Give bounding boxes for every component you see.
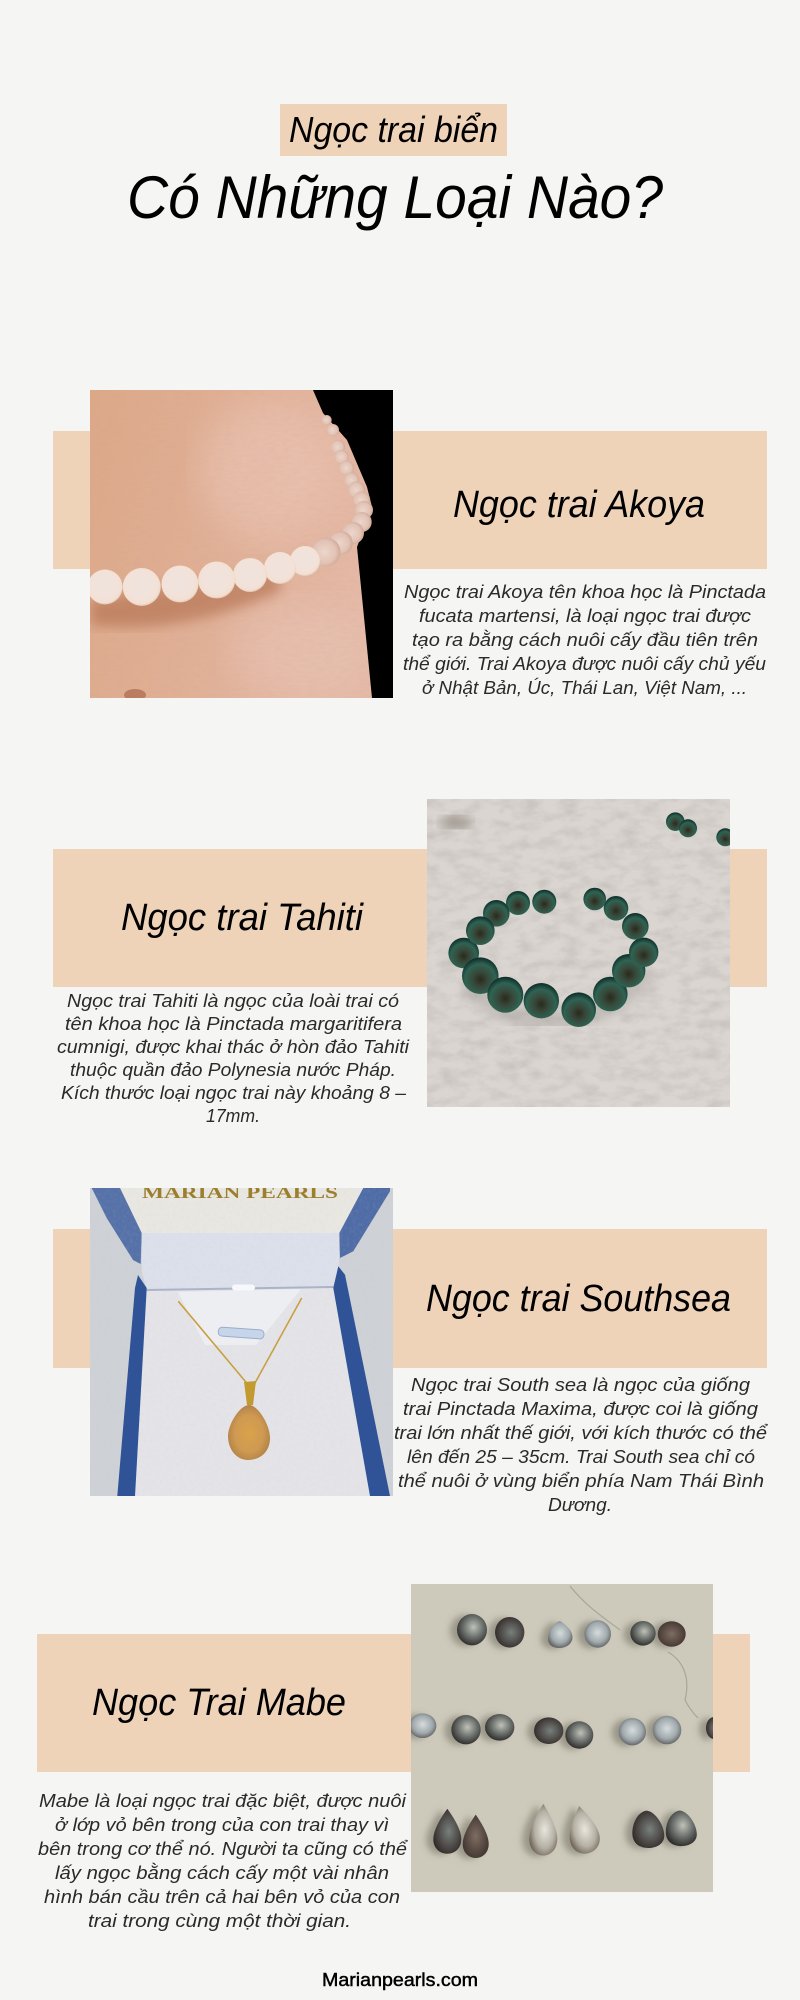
subtitle highlight box [280, 104, 507, 156]
description [394, 1375, 768, 1515]
description: thể giới. Trai Akoya được nuôi cấy chủ yếu [403, 654, 766, 674]
description: lấy ngọc bằng cách cấy một vài nhân [55, 1863, 389, 1883]
photo: Akoya pearl bracelet on wrist [88, 390, 393, 701]
description: tên khoa học là Pinctada margaritifera [65, 1014, 402, 1034]
panel: Southsea [53, 1183, 768, 1515]
description: thuộc quần đảo Polynesia nước Pháp. [70, 1060, 396, 1080]
description: Ngọc trai Tahiti là ngọc của loài trai có [67, 991, 399, 1011]
footer website: Marianpearls.com [322, 1970, 478, 1990]
description [57, 991, 410, 1126]
heading: Ngọc trai Akoya [453, 484, 705, 526]
description: bên trong cơ thể nó. Người ta cũng có thể [38, 1839, 408, 1859]
description: trai trong cùng một thời gian. [88, 1911, 351, 1931]
panel: Mabe [37, 1584, 750, 1931]
description: Mabe là loại ngọc trai đặc biệt, được nuôi [39, 1791, 407, 1811]
description: lên đến 25 – 35cm. Trai South sea chỉ có [407, 1447, 755, 1467]
photo: Mabe pearls on stone [409, 1584, 722, 1892]
description: Dương. [548, 1495, 612, 1515]
heading: Ngọc trai Tahiti [121, 897, 364, 939]
description: trai Pinctada Maxima, được coi là giống [403, 1399, 758, 1419]
subtitle: Ngọc trai biển [289, 109, 498, 150]
description: thể nuôi ở vùng biển phía Nam Thái Bình [398, 1471, 764, 1491]
heading: Ngọc Trai Mabe [92, 1682, 346, 1724]
description: cumnigi, được khai thác ở hòn đảo Tahiti [57, 1037, 410, 1057]
description [403, 582, 766, 698]
panel: Akoya [53, 390, 767, 701]
heading: Ngọc trai Southsea [426, 1278, 731, 1320]
title block [127, 104, 664, 231]
description: 17mm. [206, 1106, 260, 1126]
heading band [37, 1634, 750, 1772]
photo: Tahiti pearls on towel [427, 799, 734, 1107]
description: trai lớn nhất thế giới, với kích thước có thể [394, 1423, 768, 1443]
heading band [53, 849, 767, 987]
description [38, 1791, 408, 1931]
heading band [53, 1229, 767, 1368]
description: hình bán cầu trên cả hai bên vỏ của con [44, 1887, 400, 1907]
main title: Có Những Loại Nào? [127, 164, 664, 231]
description: ở Nhật Bản, Úc, Thái Lan, Việt Nam, ... [422, 677, 747, 698]
description: tạo ra bằng cách nuôi cấy đầu tiên trên [412, 630, 758, 650]
photo: gold pearl pendant in blue box [90, 1183, 393, 1496]
heading band [53, 431, 767, 569]
brand on box lid: MARIAN PEARLS [142, 1183, 338, 1202]
description: fucata martensi, là loại ngọc trai được [419, 606, 751, 626]
description: Ngọc trai Akoya tên khoa học là Pinctada [404, 582, 766, 602]
description: Ngọc trai South sea là ngọc của giống [411, 1375, 750, 1395]
description: Kích thước loại ngọc trai này khoảng 8 – [61, 1083, 407, 1103]
panel: Tahiti [53, 799, 767, 1126]
description: ở lớp vỏ bên trong của con trai thay vì [55, 1815, 389, 1835]
